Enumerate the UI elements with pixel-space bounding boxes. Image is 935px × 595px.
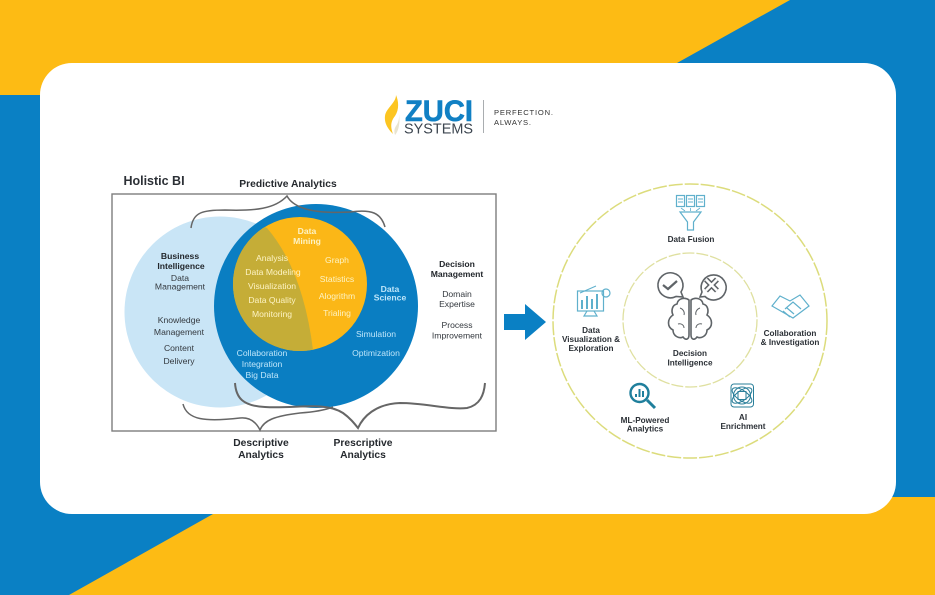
icon: magnifier chart bbox=[630, 384, 655, 408]
text: data mining list: Graph bbox=[325, 255, 349, 265]
label: collaboration and investigation: Collaboration bbox=[764, 329, 816, 338]
text: overlap list: Analysis bbox=[256, 253, 288, 263]
heading: Holistic BI: Holistic BI bbox=[123, 174, 185, 188]
tagline: PERFECTION. bbox=[494, 108, 553, 117]
text: overlap list: Visualization bbox=[248, 281, 296, 291]
text: collaboration list: Big Data bbox=[246, 370, 279, 380]
label: ai enrichment: AI bbox=[739, 413, 747, 422]
icon: flame bbox=[385, 95, 399, 135]
wordmark: ZUCI bbox=[405, 95, 473, 128]
icon: ai enrichment bbox=[730, 384, 754, 407]
text: data management: Data bbox=[171, 273, 189, 283]
label: prescriptive analytics: Analytics bbox=[340, 450, 386, 461]
label: data visualization and exploration: Exploration bbox=[568, 344, 614, 353]
frame bbox=[112, 194, 496, 431]
text: content delivery: Content bbox=[164, 343, 195, 353]
text: decision management: Management bbox=[431, 269, 483, 279]
text: data science: Data bbox=[381, 284, 400, 294]
circle: data science bbox=[214, 204, 418, 408]
label: collaboration and investigation: & Investigation bbox=[761, 338, 819, 347]
brace: prescriptive analytics bbox=[235, 383, 485, 428]
label: predictive analytics: Predictive Analytics bbox=[239, 179, 337, 190]
tagline bbox=[483, 100, 553, 133]
label: ml-powered analytics: ML-Powered bbox=[621, 416, 669, 425]
text: knowledge management: Management bbox=[154, 327, 205, 337]
text: data mining list: Statistics bbox=[320, 274, 354, 284]
label: ai enrichment: Enrichment bbox=[720, 422, 766, 431]
label: descriptive analytics: Descriptive bbox=[233, 438, 289, 449]
label: data visualization and exploration: Visualization & bbox=[562, 335, 620, 344]
text: process improvement: Improvement bbox=[432, 330, 483, 340]
text: domain expertise: Expertise bbox=[439, 299, 475, 309]
label: ml-powered analytics: Analytics bbox=[627, 424, 664, 434]
panel: Holistic BI venn diagram bbox=[112, 174, 496, 461]
tagline: ALWAYS. bbox=[494, 118, 531, 127]
text: collaboration list: Integration bbox=[242, 359, 283, 369]
icon: data visualization bbox=[578, 286, 610, 316]
label: data visualization and exploration: Data bbox=[582, 326, 600, 335]
circle: business intelligence bbox=[124, 216, 316, 408]
outer dashed ring bbox=[553, 184, 827, 458]
text: data management: Management bbox=[155, 282, 206, 292]
icon: data fusion bbox=[676, 196, 704, 230]
circle: data mining bbox=[233, 217, 367, 351]
text: data mining: Data bbox=[298, 226, 317, 236]
arrow bbox=[504, 304, 546, 340]
text: knowledge management: Knowledge bbox=[158, 315, 200, 325]
label: decision intelligence: Decision bbox=[673, 349, 707, 358]
text: simulation and optimization: Simulation bbox=[356, 329, 396, 339]
text: collaboration list: Collaboration bbox=[237, 348, 288, 358]
label: prescriptive analytics: Prescriptive bbox=[334, 438, 393, 449]
icon: brain bbox=[668, 298, 712, 339]
icon: handshake bbox=[772, 295, 809, 318]
icon: cross bubble bbox=[700, 275, 726, 300]
brace: predictive analytics bbox=[191, 196, 385, 228]
overlap region bbox=[233, 227, 313, 351]
logo: Zuci Systems bbox=[385, 95, 553, 138]
text: data mining: Mining bbox=[293, 236, 321, 246]
text: data science: Science bbox=[374, 292, 406, 302]
text: overlap list: Data Quality bbox=[248, 295, 296, 305]
text: business intelligence: Intelligence bbox=[157, 261, 205, 271]
inner dashed ring bbox=[623, 253, 757, 387]
text: simulation and optimization: Optimization bbox=[352, 348, 400, 358]
text: process improvement: Process bbox=[441, 320, 473, 330]
text: business intelligence: Business bbox=[161, 251, 199, 261]
white card bbox=[40, 63, 896, 514]
icon: check bubble bbox=[658, 273, 683, 298]
panel: decision intelligence diagram bbox=[553, 184, 827, 458]
label: descriptive analytics: Analytics bbox=[238, 450, 284, 461]
wordmark: SYSTEMS bbox=[404, 122, 473, 138]
text: data mining list: Alogrithm bbox=[319, 291, 355, 301]
text: domain expertise: Domain bbox=[442, 289, 472, 299]
label: decision intelligence: Intelligence bbox=[667, 358, 713, 368]
label: data fusion: Data Fusion bbox=[668, 235, 714, 244]
text: overlap list: Monitoring bbox=[252, 309, 292, 319]
text: decision management: Decision bbox=[439, 259, 475, 269]
text: overlap list: Data Modeling bbox=[245, 267, 301, 277]
text: content delivery: Delivery bbox=[163, 356, 195, 366]
brace: descriptive analytics bbox=[183, 404, 333, 430]
text: data mining list: Trialing bbox=[323, 308, 351, 318]
